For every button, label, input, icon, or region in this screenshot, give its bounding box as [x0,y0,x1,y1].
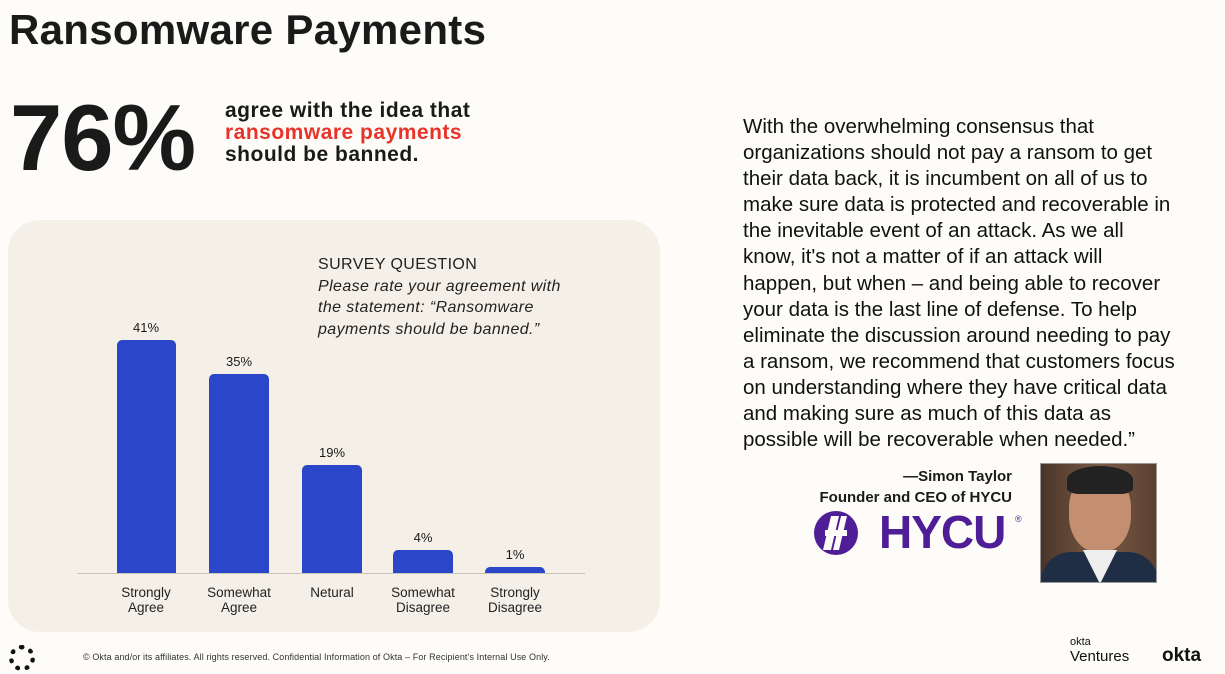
logo: HYCU: HYCU [879,506,1005,558]
stat description [225,99,470,166]
text: Somewhat [207,585,271,600]
quote text: happen, but when – and being able to recover [743,272,1160,295]
survey question: SURVEY QUESTION [318,256,477,273]
quote text: know, it's not a matter of if an attack will [743,245,1102,268]
logo: okta: okta [1162,645,1201,666]
text: Agree [128,600,164,615]
quote text: possible will be recoverable when needed.” [743,428,1135,451]
logo: HYCU: ® [1015,514,1022,524]
survey question: Please rate your agreement with [318,278,561,294]
big stat: 76% [10,85,195,190]
title: Ransomware Payments [9,6,486,53]
text: 4% [414,530,432,545]
attribution: —Simon Taylor [903,468,1012,485]
text: 19% [319,445,345,460]
panel: survey chart [8,220,660,632]
text: Agree [221,600,257,615]
text: 35% [226,354,252,369]
quote text: your data is the last line of defense. To help [743,298,1137,321]
logo: okta ventures: okta [1070,636,1091,648]
logo: okta ventures: Ventures [1070,648,1129,665]
quote text [743,115,1175,451]
survey question: payments should be banned.” [318,320,540,338]
quote text: With the overwhelming consensus that [743,115,1094,138]
text: Netural [310,585,354,600]
survey question: the statement: “Ransomware [318,299,534,316]
survey question [318,256,561,338]
text: Strongly [121,585,171,600]
quote text: organizations should not pay a ransom to get [743,141,1152,164]
text: Strongly [490,585,540,600]
text: Somewhat [391,585,455,600]
text: Disagree [396,600,450,615]
logo: okta ventures [1070,636,1129,665]
quote text: and making sure as much of this data as [743,402,1111,425]
logo: HYCU [814,506,1022,558]
quote text: a ransom, we recommend that customers focus [743,350,1175,373]
text: 41% [133,320,159,335]
quote text: the inevitable event of an attack. As we all [743,219,1124,242]
quote text: on understanding where they have critical data [743,376,1167,399]
quote text: eliminate the discussion around needing to pay [743,324,1170,347]
bar chart [77,320,585,615]
icon: okta sunburst [9,645,35,671]
footer text: © Okta and/or its affiliates. All rights reserved. Confidential Information of Okta – For Recipient’s Internal Use Only. [83,652,550,662]
stat description: should be banned. [225,143,419,166]
text: Disagree [488,600,542,615]
text: 1% [506,547,524,562]
quote text: make sure data is protected and recoverable in [743,193,1170,216]
attribution [820,468,1012,506]
stat description: ransomware payments [225,121,462,144]
photo: Simon Taylor [1040,463,1157,583]
attribution: Founder and CEO of HYCU [820,489,1012,506]
stat description: agree with the idea that [225,99,470,122]
quote text: their data back, it is incumbent on all of us to [743,167,1148,190]
